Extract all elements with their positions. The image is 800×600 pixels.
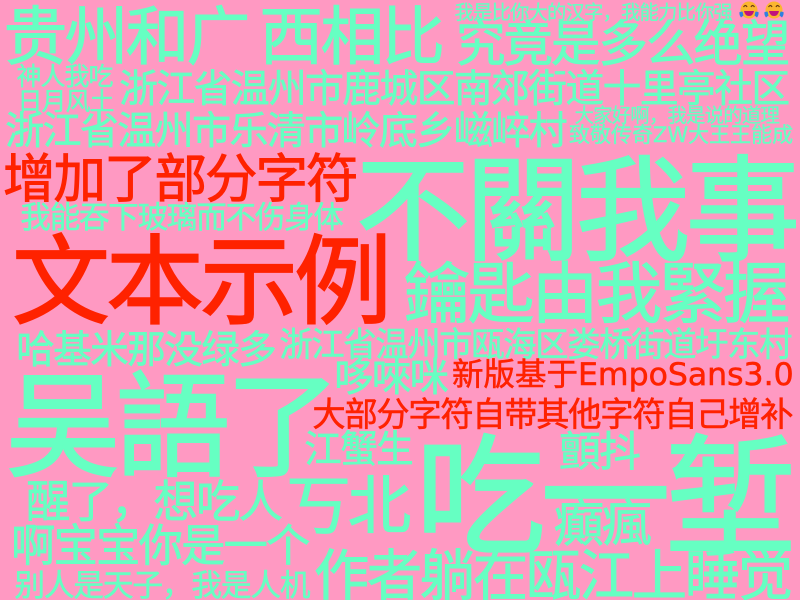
word: 浙江省温州市瓯海区娄桥街道圩东村: 浙江省温州市瓯海区娄桥街道圩东村: [279, 317, 791, 366]
word: 浙江省温州市乐清市岭底乡嵫崪村: 浙江省温州市乐清市岭底乡嵫崪村: [5, 100, 566, 156]
word: 啊宝宝你是一个: 啊宝宝你是一个: [11, 510, 309, 574]
word: 新版基于EmpoSans3.0: 新版基于EmpoSans3.0: [452, 357, 794, 393]
word: 吴語了: 吴語了: [6, 334, 336, 500]
word: 大家好啊，我是说的道理: 大家好啊，我是说的道理: [575, 100, 779, 128]
word: 江蟹生: 江蟹生: [304, 419, 412, 473]
word: 文本示例: 文本示例: [12, 204, 388, 345]
word: 吃一堑: 吃一堑: [416, 392, 791, 580]
word: 致敬传奇ZW大王王能成: 致敬传奇ZW大王王能成: [569, 123, 793, 147]
word: 癲瘋: 癲瘋: [554, 484, 650, 556]
word: 大部分字符自带其他字符自己增补: 大部分字符自带其他字符自己增补: [312, 387, 792, 436]
word: 神人我吃: 神人我吃: [17, 57, 113, 93]
icon: laughing emoji 2: [764, 2, 784, 18]
word: 哆唻咪: 哆唻咪: [334, 347, 447, 403]
word: 日月风土: 日月风土: [18, 82, 114, 118]
word: 我能吞下玻璃而不伤身体: 我能吞下玻璃而不伤身体: [20, 193, 343, 237]
icon: laughing emoji 1: [739, 2, 759, 18]
word: 哈基米那没绿多: 哈基米那没绿多: [16, 319, 275, 375]
word: 浙江省温州市鹿城区南郊街道十里亭社区: 浙江省温州市鹿城区南郊街道十里亭社区: [119, 58, 789, 114]
word: 不關我事: 不關我事: [356, 118, 796, 284]
word: 醒了，想吃人: 醒了，想吃人: [26, 466, 281, 530]
word: 顫抖: 顫抖: [559, 418, 639, 478]
word: 鑰匙由我緊握: 鑰匙由我緊握: [404, 241, 788, 337]
word: 丂北: 丂北: [287, 455, 409, 547]
word: 究竟是多么绝望: 究竟是多么绝望: [456, 5, 788, 76]
word: 增加了部分字符: 增加了部分字符: [3, 137, 356, 213]
